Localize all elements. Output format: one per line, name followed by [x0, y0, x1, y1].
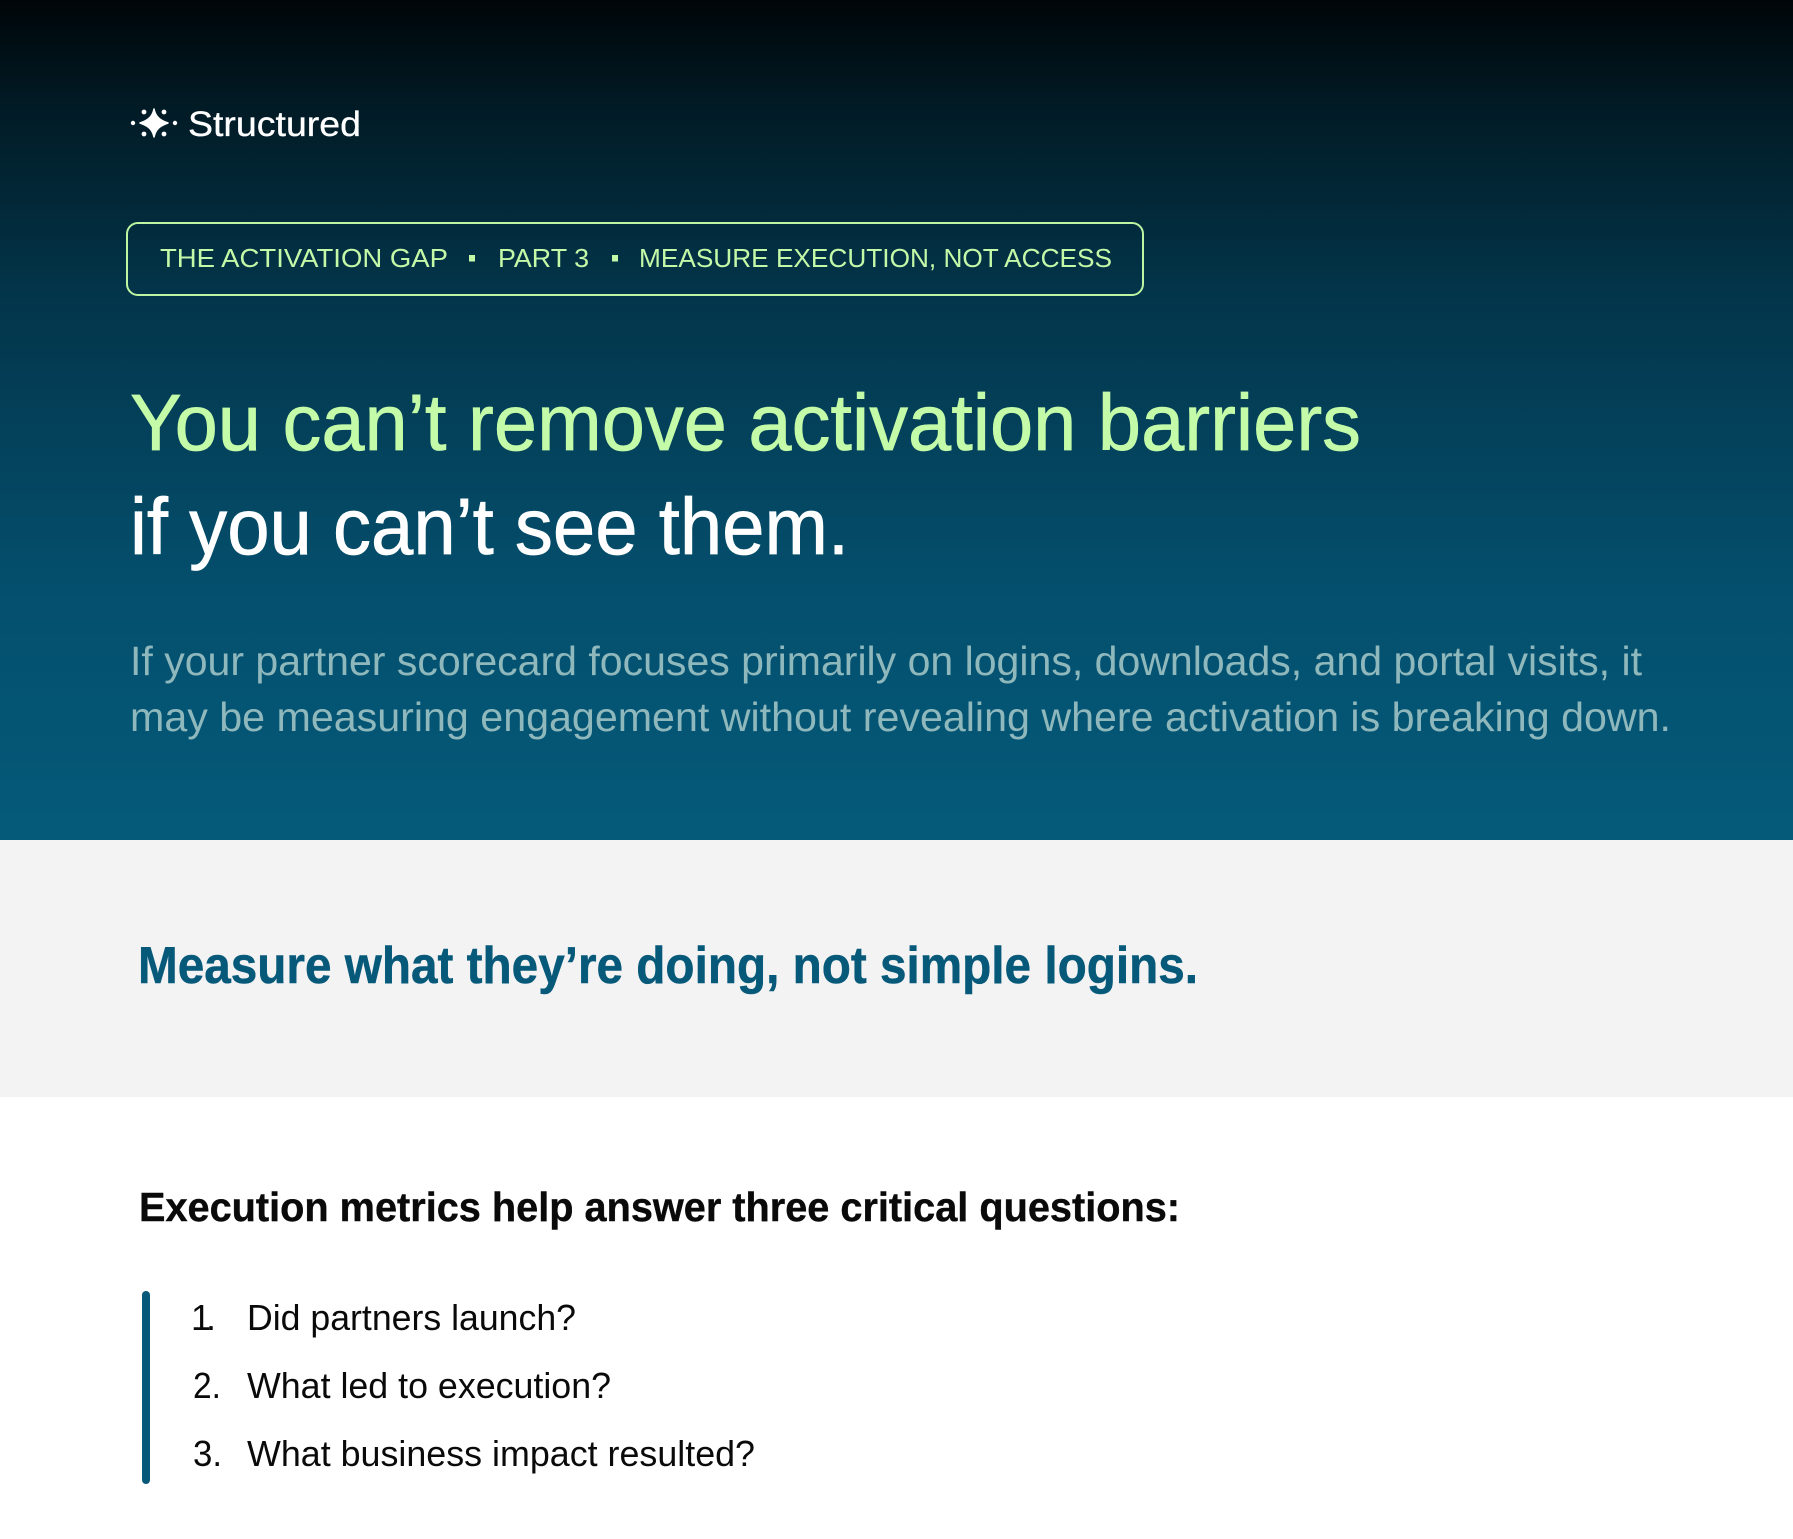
subheading: Measure what they’re doing, not simple logins.	[138, 937, 1198, 995]
badge text: THE ACTIVATION GAP	[160, 243, 448, 273]
logo: Structured	[131, 105, 361, 144]
badge text: MEASURE EXECUTION, NOT ACCESS	[639, 243, 1112, 273]
headline line 2: if you can’t see them.	[130, 482, 849, 571]
item 1: Did partners launch?	[247, 1297, 576, 1338]
accent bar	[142, 1291, 150, 1484]
badge: series label	[127, 223, 1143, 295]
item 3: What business impact resulted?	[247, 1433, 755, 1474]
panel: hero header	[0, 0, 1793, 840]
badge text	[160, 243, 1112, 273]
intro paragraph	[130, 638, 1671, 740]
questions heading: Execution metrics help answer three critical questions:	[139, 1184, 1180, 1230]
intro paragraph: may be measuring engagement without revealing where activation is breaking down.	[130, 694, 1671, 740]
intro paragraph: If your partner scorecard focuses primarily on logins, downloads, and portal visits, it	[130, 638, 1643, 684]
logo wordmark: Structured	[188, 105, 361, 144]
item 3: 3.	[193, 1433, 222, 1474]
badge text: PART 3	[498, 243, 589, 273]
headline line 1: You can’t remove activation barriers	[130, 378, 1361, 467]
item 2: What led to execution?	[247, 1365, 611, 1406]
icon: sparkle	[131, 109, 177, 137]
panel: questions	[139, 1184, 1180, 1484]
item 1: 1.	[191, 1297, 213, 1338]
numbered list	[191, 1297, 755, 1474]
item 2: 2.	[193, 1365, 221, 1406]
headline	[130, 378, 1361, 571]
panel: subheading band	[0, 840, 1793, 1097]
